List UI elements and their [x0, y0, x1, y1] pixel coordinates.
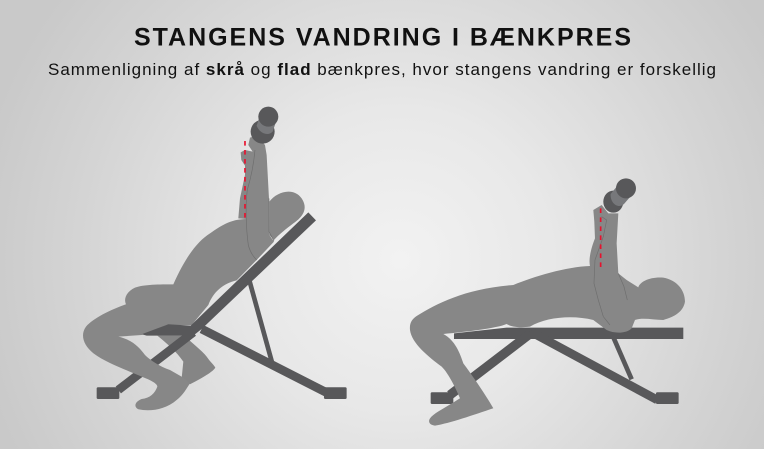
illustration: incline bench press: [83, 107, 347, 410]
seat and backrest: [142, 212, 316, 336]
red dashed bar path: [598, 208, 603, 267]
arm contour lines: [594, 217, 627, 325]
bench frame: [97, 277, 347, 399]
body: [410, 205, 685, 426]
body: [83, 136, 274, 410]
arm contour lines: [246, 150, 274, 260]
head: [269, 192, 305, 240]
title: STANGENS VANDRING I BÆNKPRES: [134, 24, 631, 52]
far leg: [157, 336, 215, 384]
red dashed bar path: [242, 141, 247, 218]
subtitle: Sammenligning af skrå og flad bænkpres, hvor stangens vandring er forskellig: [48, 60, 716, 79]
illustration: flat bench press: [410, 178, 685, 426]
icon: dumbbell: [603, 178, 636, 213]
icon: dumbbell: [251, 107, 278, 144]
bench frame: [431, 328, 683, 404]
